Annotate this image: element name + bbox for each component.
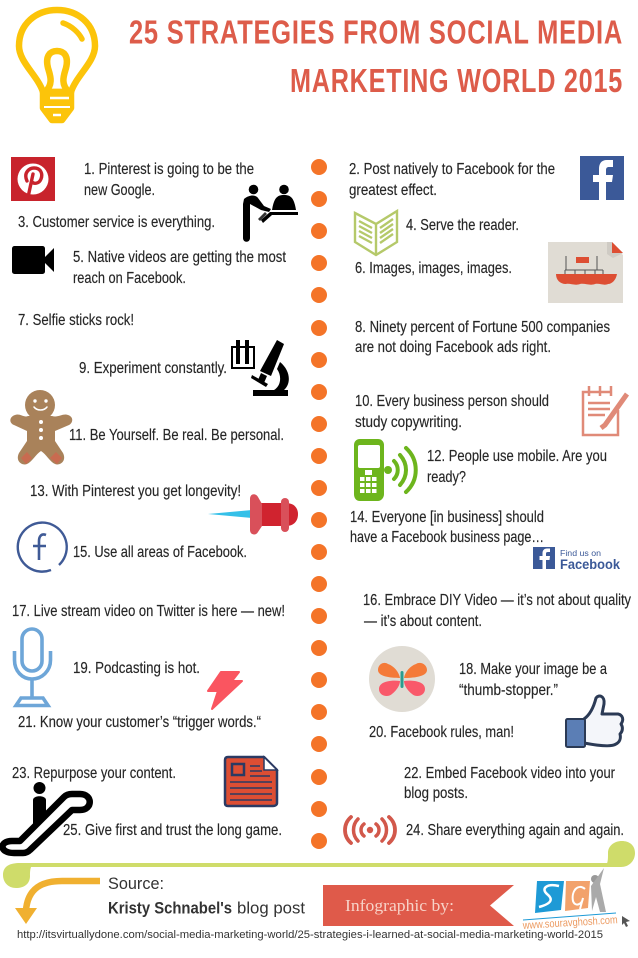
strategy 10: study copywriting. xyxy=(355,414,462,431)
icon: mobile phone signal xyxy=(354,439,416,501)
source credit: Source: xyxy=(108,874,164,893)
strategy 23: 23. Repurpose your content. xyxy=(12,765,176,782)
icon: microphone xyxy=(14,629,50,706)
source credit xyxy=(108,874,305,918)
icon: push pin xyxy=(208,494,298,534)
strategy 12: ready? xyxy=(427,469,466,486)
strategy 18: “thumb-stopper.” xyxy=(459,682,558,699)
icon: pinterest xyxy=(11,157,55,201)
strategy 5 xyxy=(73,249,287,287)
icon: broadcast signal xyxy=(345,817,395,843)
icon: thumbs up xyxy=(566,696,623,747)
icon: newspaper xyxy=(225,757,277,806)
ribbon: infographic by xyxy=(323,885,514,926)
icon: video camera xyxy=(12,246,54,274)
strategy 8: are not doing Facebook ads right. xyxy=(355,339,551,356)
strategy 22: blog posts. xyxy=(404,785,468,802)
strategy 7: 7. Selfie sticks rock! xyxy=(18,312,134,329)
strategy 14 xyxy=(350,509,544,546)
strategy 5: 5. Native videos are getting the most xyxy=(73,249,287,266)
icon: ship tile xyxy=(548,242,623,303)
strategy 1: 1. Pinterest is going to be the xyxy=(84,161,254,178)
ribbon: infographic by: Infographic by: xyxy=(345,896,454,915)
icon: open book xyxy=(355,211,397,255)
logo: SG mark: www.souravghosh.com xyxy=(522,914,618,932)
footer divider line xyxy=(3,841,635,888)
strategy 2 xyxy=(349,161,555,199)
source url: http://itsvirtuallydone.com/social-media-marketing-world/25-strategies-i-learned-at-social-media-marketing-world-2015 xyxy=(17,929,603,941)
source credit: Kristy Schnabel's xyxy=(108,898,232,918)
icon: notepad and pencil xyxy=(583,386,627,435)
icon: microscope and test tubes xyxy=(231,340,289,396)
icon: find us on facebook: Find us on xyxy=(560,548,601,558)
icon: gingerbread man xyxy=(10,390,72,464)
icon: light bulb xyxy=(19,10,95,120)
strategy 13: 13. With Pinterest you get longevity! xyxy=(30,483,241,500)
icon: facebook square xyxy=(580,156,624,200)
strategy 5: reach on Facebook. xyxy=(73,270,186,287)
strategy 12 xyxy=(427,448,607,486)
icon: escalator xyxy=(2,782,90,853)
timeline dots xyxy=(311,159,327,849)
strategy 16 xyxy=(363,592,631,630)
strategy 10 xyxy=(355,393,549,431)
strategy 11: 11. Be Yourself. Be real. Be personal. xyxy=(69,427,284,444)
strategy 10: 10. Every business person should xyxy=(355,393,549,410)
strategy 1: new Google. xyxy=(84,182,155,199)
strategy 25: 25. Give first and trust the long game. xyxy=(63,822,282,839)
logo: SG mark xyxy=(522,868,630,932)
strategy 18: 18. Make your image be a xyxy=(459,661,607,678)
strategy 17: 17. Live stream video on Twitter is here — new! xyxy=(12,603,285,620)
icon: customer service xyxy=(243,185,298,242)
strategy 1 xyxy=(84,161,254,199)
strategy 21: 21. Know your customer’s “trigger words.“ xyxy=(18,714,261,731)
icon: find us on facebook: Facebook xyxy=(560,557,620,572)
strategy 16: — it’s about content. xyxy=(364,613,482,630)
strategy 14: 14. Everyone [in business] should xyxy=(350,509,544,526)
strategy 14: have a Facebook business page… xyxy=(350,529,544,546)
strategy 22 xyxy=(404,765,615,802)
strategy 9: 9. Experiment constantly. xyxy=(79,360,227,377)
title xyxy=(129,14,623,100)
icon: butterfly badge xyxy=(369,646,435,712)
icon: find us on facebook xyxy=(533,547,620,572)
strategy 8 xyxy=(355,319,610,356)
strategy 4: 4. Serve the reader. xyxy=(406,217,519,234)
strategy 18 xyxy=(459,661,607,699)
strategy 15: 15. Use all areas of Facebook. xyxy=(73,544,247,561)
strategy 20: 20. Facebook rules, man! xyxy=(369,724,514,741)
strategy 19: 19. Podcasting is hot. xyxy=(73,660,200,677)
strategy 6: 6. Images, images, images. xyxy=(355,260,512,277)
arrow: source pointer xyxy=(15,881,100,924)
strategy 3: 3. Customer service is everything. xyxy=(18,214,215,231)
strategy 2: greatest effect. xyxy=(349,182,437,199)
icon: lightning bolt xyxy=(208,672,242,709)
icon: facebook circle xyxy=(18,523,67,572)
strategy 2: 2. Post natively to Facebook for the xyxy=(349,161,555,178)
source credit: blog post xyxy=(237,898,305,918)
